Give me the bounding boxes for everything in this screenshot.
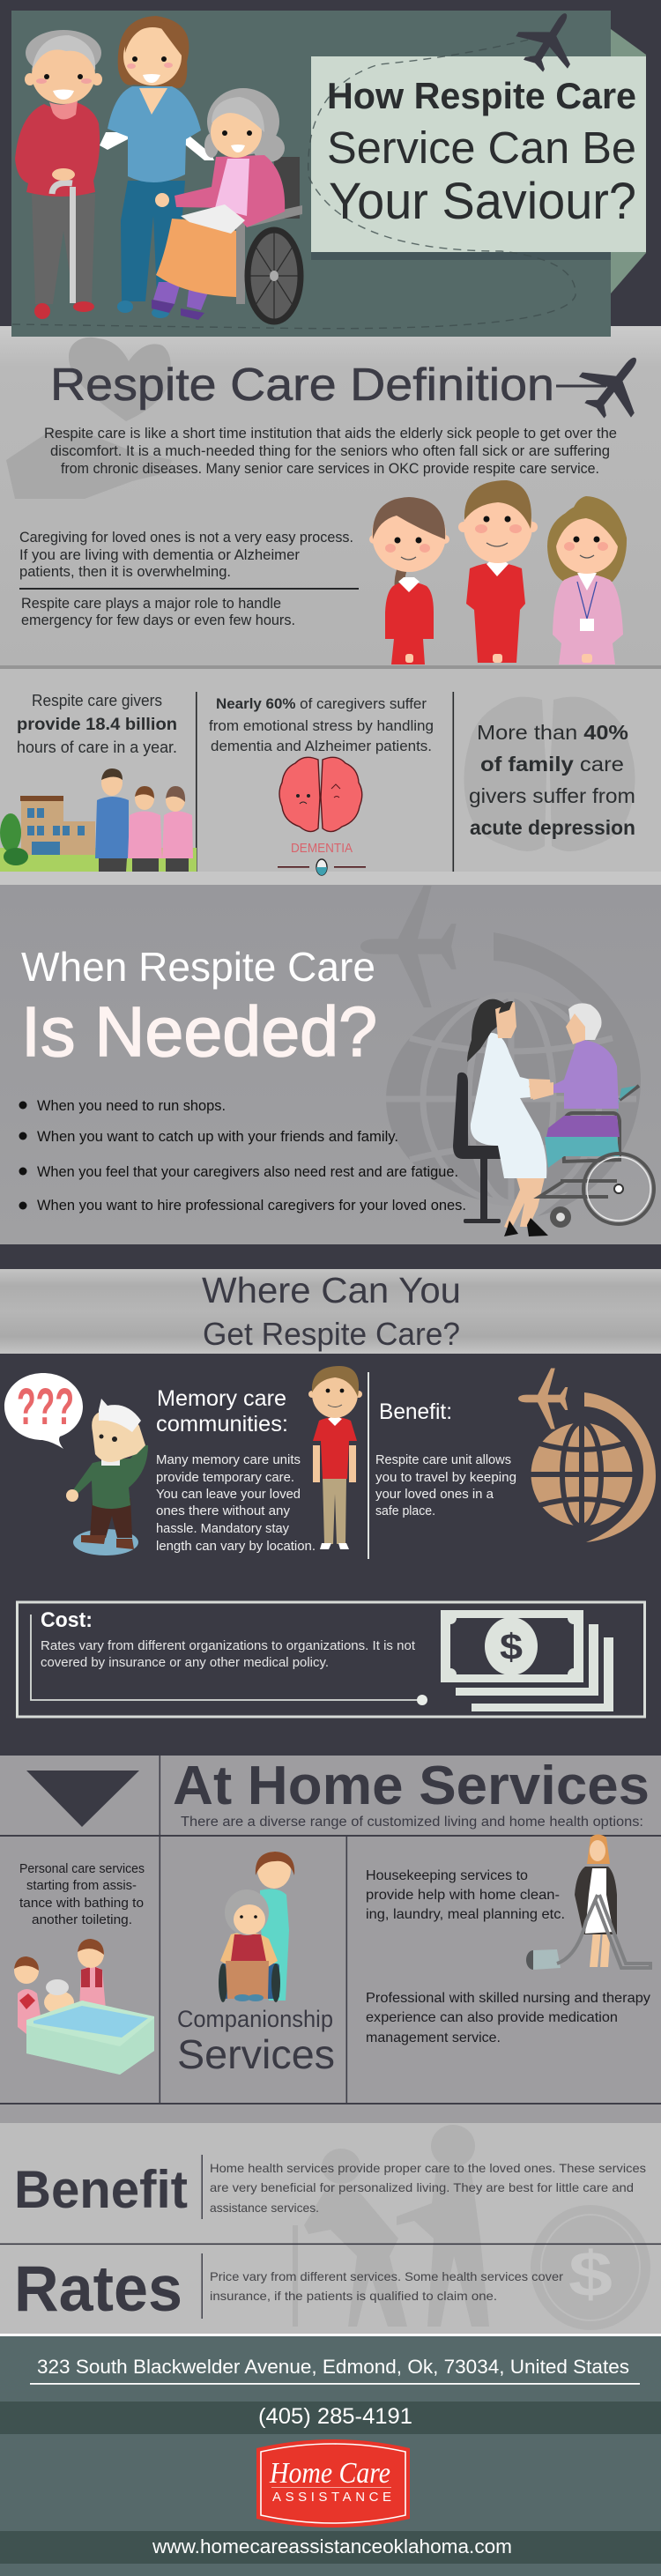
personal care text: tance with bathing to <box>19 1897 144 1911</box>
watermark: brain <box>464 697 635 851</box>
callout: cost <box>18 1602 645 1717</box>
stat: 60 percent: Nearly 60% of caregivers suffer <box>216 695 427 712</box>
address: 323 South Blackwelder Avenue, Edmond, Ok, 73034, United States <box>37 2356 629 2378</box>
hero green panel <box>11 11 611 337</box>
subheading: There are a diverse range of customized living and home health options: <box>181 1815 643 1830</box>
rates text <box>201 2253 563 2319</box>
phone: (405) 285-4191 <box>258 2404 412 2429</box>
benefit text: Benefit: <box>379 1399 452 1424</box>
panel: benefit and rates <box>0 2125 661 2330</box>
title text: How Respite Care <box>327 75 636 116</box>
illustration: woman with lanyard <box>547 496 627 664</box>
personal care text: Personal care services <box>19 1862 145 1876</box>
stat: 60 percent: dementia and Alzheimer patients. <box>211 738 432 754</box>
definition paragraph: discomfort. It is a much-needed thing for the seniors who often fall sick or are suffering <box>50 442 610 459</box>
stat: 60 percent <box>209 695 434 754</box>
ribbon fold <box>611 29 646 293</box>
memory care text: Memory care <box>157 1386 286 1411</box>
watermark: hand and heart <box>6 338 172 499</box>
memory care text: You can leave your loved <box>156 1487 301 1502</box>
illustration: bathing an elder <box>14 1939 154 2075</box>
companionship label: Services <box>177 2031 335 2077</box>
stat: 40 percent: of family care <box>480 753 624 776</box>
housekeeping text <box>366 1868 565 1922</box>
benefit text: are very beneficial for personalized living. They are best for little care and <box>210 2180 634 2194</box>
title text: Service Can Be <box>327 122 636 173</box>
memory care text: ones there without any <box>156 1503 290 1518</box>
personal care text: another toileting. <box>32 1913 132 1927</box>
panel: where can you get respite care <box>4 1270 656 1717</box>
companionship label <box>177 2006 335 2077</box>
stat: 18.4 billion hours <box>17 692 177 756</box>
illustration: confused old man <box>66 1399 148 1555</box>
heading <box>21 944 377 1071</box>
illustration: nurse in blue <box>100 16 214 318</box>
icon: sad brain: DEMENTIA <box>291 841 353 856</box>
icon: sad brain <box>278 757 366 875</box>
caregiving text: Respite care plays a major role to handle <box>21 595 281 612</box>
panel: when respite care is needed <box>19 886 654 1236</box>
benefit text: your loved ones in a <box>375 1487 494 1502</box>
benefit text: safe place. <box>375 1503 435 1518</box>
panel: at home services <box>0 1756 661 2105</box>
title text: Your Saviour? <box>329 173 636 230</box>
divider <box>368 1372 369 1559</box>
caregiving text: emergency for few days or even few hours. <box>21 612 295 628</box>
benefit text: Home health services provide proper care to the loved ones. These services <box>210 2161 646 2175</box>
heading: When Respite Care <box>21 944 375 990</box>
housekeeping text: ing, laundry, meal planning etc. <box>366 1907 565 1922</box>
watermark: globe grid <box>386 995 636 1203</box>
housekeeping text: provide help with home clean- <box>366 1888 560 1903</box>
heading <box>202 1270 461 1352</box>
illustration: elderly woman with cane <box>15 30 102 319</box>
definition paragraph <box>44 425 617 477</box>
rates text: insurance, if the patients is qualified to claim one. <box>210 2289 497 2303</box>
panel: footer contact <box>0 2356 661 2564</box>
benefit heading: Benefit <box>14 2160 188 2219</box>
personal care text: starting from assis- <box>26 1879 137 1893</box>
icon: dollar bills <box>441 1610 613 1711</box>
benefit text: you to travel by keeping <box>375 1470 516 1485</box>
memory care text <box>156 1386 316 1554</box>
panel: statistics <box>0 692 635 875</box>
rates heading: Rates <box>14 2253 182 2325</box>
caregiving text: If you are living with dementia or Alzheimer <box>19 546 300 563</box>
personal care text <box>19 1862 145 1927</box>
professional care text: management service. <box>366 2030 501 2045</box>
grid lines <box>0 1756 661 2105</box>
stat: 18.4 billion hours: provide 18.4 billion <box>17 716 177 734</box>
definition paragraph: from chronic diseases. Many senior care services in OKC provide respite care service. <box>61 460 599 477</box>
heading: At Home Services <box>173 1756 650 1816</box>
memory care text: hassle. Mandatory stay <box>156 1521 289 1536</box>
housekeeping text: Housekeeping services to <box>366 1868 528 1883</box>
stat: 60 percent: from emotional stress by handling <box>209 717 434 734</box>
heading: Respite Care Definition <box>50 360 554 411</box>
caregiving text: Caregiving for loved ones is not a very easy process. <box>19 529 353 546</box>
watermark: elderly couple <box>293 2125 489 2327</box>
rates text: Price vary from different services. Some health services cover <box>210 2269 563 2283</box>
title box <box>311 56 646 260</box>
definition paragraph: Respite care is like a short time institution that aids the elderly sick people to get over the <box>44 425 617 442</box>
bullet list <box>19 1097 466 1214</box>
illustration: male caregiver <box>458 480 538 663</box>
title text <box>327 75 636 230</box>
watermark: coin: $ <box>568 2239 613 2310</box>
benefit text: assistance services. <box>210 2201 319 2215</box>
icon: speech bubble with question marks <box>4 1373 83 1449</box>
stat: 40 percent <box>469 721 635 839</box>
heading: Get Respite Care? <box>203 1316 460 1352</box>
icon: speech bubble with question marks: ??? <box>17 1378 74 1436</box>
website: www.homecareassistanceoklahoma.com <box>152 2535 512 2557</box>
memory care text: provide temporary care. <box>156 1470 294 1485</box>
illustration: carer pushing wheelchair <box>219 1852 294 2002</box>
stat: 40 percent: More than 40% <box>477 721 628 744</box>
callout: cost: covered by insurance or any other medical policy. <box>41 1655 329 1670</box>
illustration: care home and staff <box>0 768 197 872</box>
panel: hero <box>11 0 646 337</box>
illustration: housekeeper with vacuum <box>526 1835 650 1970</box>
professional care text: experience can also provide medication <box>366 2010 618 2025</box>
panel: respite care definition <box>6 338 661 664</box>
caregiving text <box>19 529 359 628</box>
caregiving text: patients, then it is overwhelming. <box>19 563 231 580</box>
companionship label: Companionship <box>177 2006 333 2032</box>
website <box>0 2531 661 2564</box>
memory care text: length can vary by location. <box>156 1539 316 1554</box>
dashed flight path <box>12 37 576 329</box>
logo <box>256 2439 410 2528</box>
callout: cost: Rates vary from different organizations to organizations. It is not <box>41 1638 416 1653</box>
illustration: girl caregiver <box>369 497 449 664</box>
logo: Home Care <box>269 2457 390 2490</box>
memory care text: communities: <box>156 1412 288 1436</box>
benefit text: Respite care unit allows <box>375 1452 511 1467</box>
logo: ASSISTANCE <box>272 2490 391 2505</box>
professional care text <box>366 1991 650 2045</box>
phone <box>0 2402 661 2434</box>
callout: cost: Cost: <box>41 1608 93 1632</box>
stat: 40 percent: givers suffer from <box>469 784 635 807</box>
icon: plane <box>508 0 591 82</box>
illustration: standing man <box>308 1366 362 1549</box>
watermark: coin <box>531 2205 650 2330</box>
icon: dollar bills: $ <box>500 1626 523 1667</box>
illustration: woman in wheelchair <box>152 88 302 322</box>
watermark: plane and globe <box>360 886 641 1216</box>
stat: 18.4 billion hours: hours of care in a year. <box>17 739 177 756</box>
divider <box>0 2244 661 2245</box>
benefit text <box>201 2155 646 2219</box>
column dividers <box>196 692 454 872</box>
icon: globe and plane <box>518 1368 656 1542</box>
stat: 40 percent: acute depression <box>470 816 635 839</box>
bullet list: When you want to hire professional caregivers for your loved ones. <box>37 1197 466 1214</box>
icon: down triangle <box>26 1771 139 1827</box>
benefit text <box>375 1399 516 1518</box>
heading: Is Needed? <box>21 992 377 1071</box>
icon: plane with trail <box>556 338 661 431</box>
bullet list: When you need to run shops. <box>37 1097 226 1114</box>
bullet list: When you want to catch up with your friends and family. <box>37 1128 398 1145</box>
stat: 18.4 billion hours: Respite care givers <box>32 692 162 709</box>
memory care text: Many memory care units <box>156 1452 301 1467</box>
illustration: doctor holding patient's hand <box>453 999 654 1236</box>
heading: Where Can You <box>202 1270 461 1310</box>
bullet list: When you feel that your caregivers also need rest and are fatigue. <box>37 1163 458 1180</box>
professional care text: Professional with skilled nursing and therapy <box>366 1991 650 2006</box>
